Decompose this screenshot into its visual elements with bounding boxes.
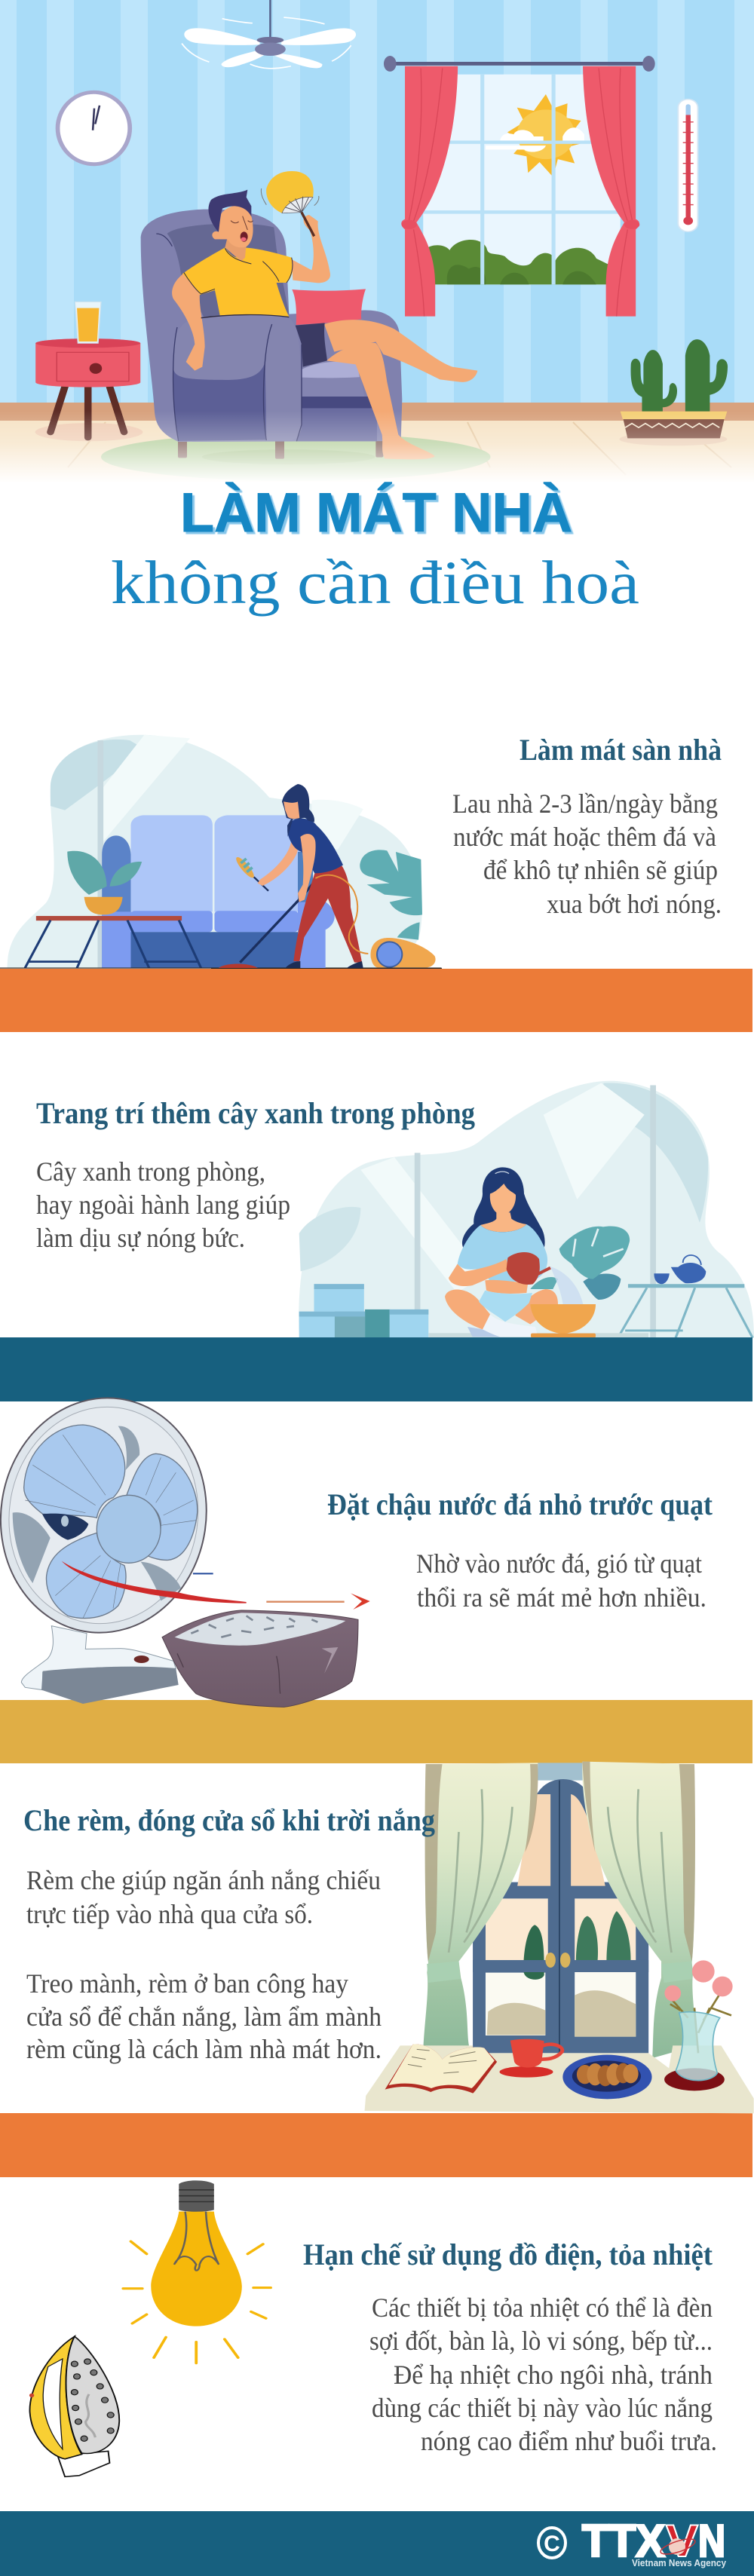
front arm	[298, 834, 316, 902]
near leg	[326, 343, 435, 459]
title line 2: không cần điều hoà	[111, 548, 639, 617]
face and neck	[480, 1184, 526, 1232]
yellow band	[0, 1700, 752, 1763]
footer band with TTXVN logo	[0, 2511, 754, 2576]
navy shirt	[287, 819, 343, 873]
shoes	[285, 961, 363, 968]
feather duster	[234, 855, 268, 891]
curtains and rod	[384, 56, 655, 317]
hero illustration: hot room	[0, 0, 754, 483]
ice bowl	[162, 1610, 358, 1707]
heading: Trang trí thêm cây xanh trong phòng	[36, 1096, 475, 1130]
agency logo: TTX	[582, 2516, 665, 2566]
icon: iron	[29, 2336, 119, 2476]
blade ribs	[25, 1435, 196, 1619]
storage boxes	[299, 1284, 428, 1338]
agency logo	[582, 2516, 727, 2568]
body text: Nhờ vào nước đá, gió từ quạt	[416, 1548, 702, 1579]
hand fan	[261, 171, 319, 236]
vase with flowers	[664, 1960, 733, 2091]
copyright symbol	[538, 2528, 566, 2558]
body text: rèm cũng là cách làm nhà mát hơn.	[26, 2034, 382, 2064]
left arm	[172, 274, 205, 371]
body text: Để hạ nhiệt cho ngôi nhà, tránh	[394, 2360, 713, 2390]
broom brush and stick	[219, 881, 315, 968]
agency logo: V	[666, 2516, 698, 2566]
table with teapot	[618, 1255, 752, 1338]
agency logo: Vietnam News Agency	[632, 2557, 727, 2568]
orange bowl	[530, 1304, 596, 1337]
copyright symbol: C	[544, 2532, 560, 2556]
orange band	[0, 969, 752, 1032]
hair	[462, 1167, 545, 1250]
illustration: window with green curtains	[365, 1762, 754, 2113]
water stream	[550, 1267, 583, 1304]
body text: thổi ra sẽ mát mẻ hơn nhiều.	[417, 1582, 706, 1613]
title line 1: LÀM MÁT NHÀ	[180, 482, 572, 544]
body text	[452, 789, 722, 919]
body text	[36, 1156, 290, 1253]
blue top	[458, 1224, 547, 1282]
illustration: woman watering plant	[428, 1167, 648, 1337]
agency logo: N	[698, 2516, 725, 2566]
side table with juice	[35, 302, 143, 441]
legs and shorts	[445, 1280, 558, 1337]
fan hub	[97, 1495, 161, 1563]
illustration: room background with boxes and table	[299, 1081, 754, 1338]
coffee table	[25, 916, 201, 968]
dark motor gap	[42, 1514, 88, 1540]
window with sun, clouds and trees	[423, 75, 621, 284]
illustration: electric fan	[0, 1385, 370, 1707]
plate of cookies	[562, 2055, 652, 2099]
orange band	[0, 2113, 752, 2177]
far leg	[324, 320, 477, 382]
heading: Che rèm, đóng cửa sổ khi trời nắng	[23, 1803, 435, 1837]
thermometer	[678, 100, 697, 231]
fan blades	[24, 1425, 198, 1619]
body text: Lau nhà 2-3 lần/ngày bằng	[452, 789, 718, 819]
body text	[26, 1865, 382, 2064]
body text: làm dịu sự nóng bức.	[36, 1223, 245, 1253]
panel: section 1 floor cooling	[0, 733, 752, 1032]
cactus pot	[619, 339, 728, 446]
hair and face	[282, 784, 314, 837]
back arm	[258, 839, 298, 886]
illustration: living room background	[0, 735, 442, 968]
pillow	[292, 289, 366, 325]
body text: dùng các thiết bị này vào lúc nắng	[372, 2393, 713, 2423]
body text: Các thiết bị tỏa nhiệt có thể là đèn	[372, 2293, 713, 2323]
left curtain	[423, 1763, 538, 2051]
title	[111, 482, 639, 617]
windowsill	[365, 2045, 754, 2113]
rug	[101, 433, 491, 481]
teal band	[0, 1337, 752, 1401]
fan stand	[21, 1626, 179, 1704]
body text: Cây xanh trong phòng,	[36, 1156, 265, 1187]
body text: xua bớt hơi nóng.	[547, 889, 722, 919]
floor	[0, 403, 754, 482]
arm	[449, 1259, 509, 1286]
vacuum hose	[315, 875, 368, 954]
armchair and man	[141, 171, 477, 459]
body text: sợi đốt, bàn là, lò vi sóng, bếp từ...	[369, 2326, 713, 2356]
body text: cửa sổ để chắn nắng, làm ẩm mành	[26, 2002, 382, 2032]
armchair	[141, 210, 402, 459]
body text: trực tiếp vào nhà qua cửa sổ.	[26, 1899, 313, 1929]
body text: hay ngoài hành lang giúp	[36, 1190, 290, 1220]
heading: Làm mát sàn nhà	[520, 733, 722, 767]
right curtain	[582, 1762, 697, 2058]
body text: nước mát hoặc thêm đá và	[453, 822, 716, 852]
open book	[385, 2045, 497, 2094]
window frame	[473, 1763, 648, 2053]
body text: Rèm che giúp ngăn ánh nắng chiếu	[26, 1865, 381, 1895]
monstera leaves	[360, 850, 422, 940]
body text	[416, 1548, 706, 1613]
red trousers	[293, 865, 362, 963]
body text: Treo mành, rèm ở ban công hay	[26, 1968, 348, 1999]
potted plant	[67, 851, 142, 914]
watering can	[507, 1252, 550, 1285]
ceiling fan	[182, 0, 356, 69]
shorts	[296, 323, 327, 367]
heading: Đặt chậu nước đá nhỏ trước quạt	[327, 1487, 713, 1521]
panel: section 2 green plants	[0, 1081, 754, 1401]
fan cage	[0, 1385, 222, 1646]
monstera leaves	[530, 1226, 630, 1300]
red airflow arrow	[62, 1561, 370, 1610]
floor fade to white	[0, 411, 754, 483]
panel: section 5 heat appliances	[29, 2180, 717, 2476]
heading: Hạn chế sử dụng đồ điện, tỏa nhiệt	[303, 2238, 713, 2271]
vacuum cleaner	[370, 938, 436, 967]
body text	[369, 2293, 717, 2456]
icon: light bulb	[123, 2180, 271, 2363]
illustration: woman vacuuming	[211, 784, 442, 969]
raised arm	[292, 215, 330, 283]
shirt	[182, 247, 293, 317]
red cup	[500, 2039, 562, 2078]
body text: để khô tự nhiên sẽ giúp	[483, 855, 718, 885]
wall with stripes	[0, 0, 754, 404]
body text: nóng cao điểm như buổi trưa.	[421, 2426, 717, 2456]
head and hair	[184, 190, 293, 294]
panel: section 3 ice in front of fan	[0, 1385, 752, 1763]
panel: section 4 curtains	[0, 1762, 754, 2177]
wall clock	[58, 92, 130, 164]
